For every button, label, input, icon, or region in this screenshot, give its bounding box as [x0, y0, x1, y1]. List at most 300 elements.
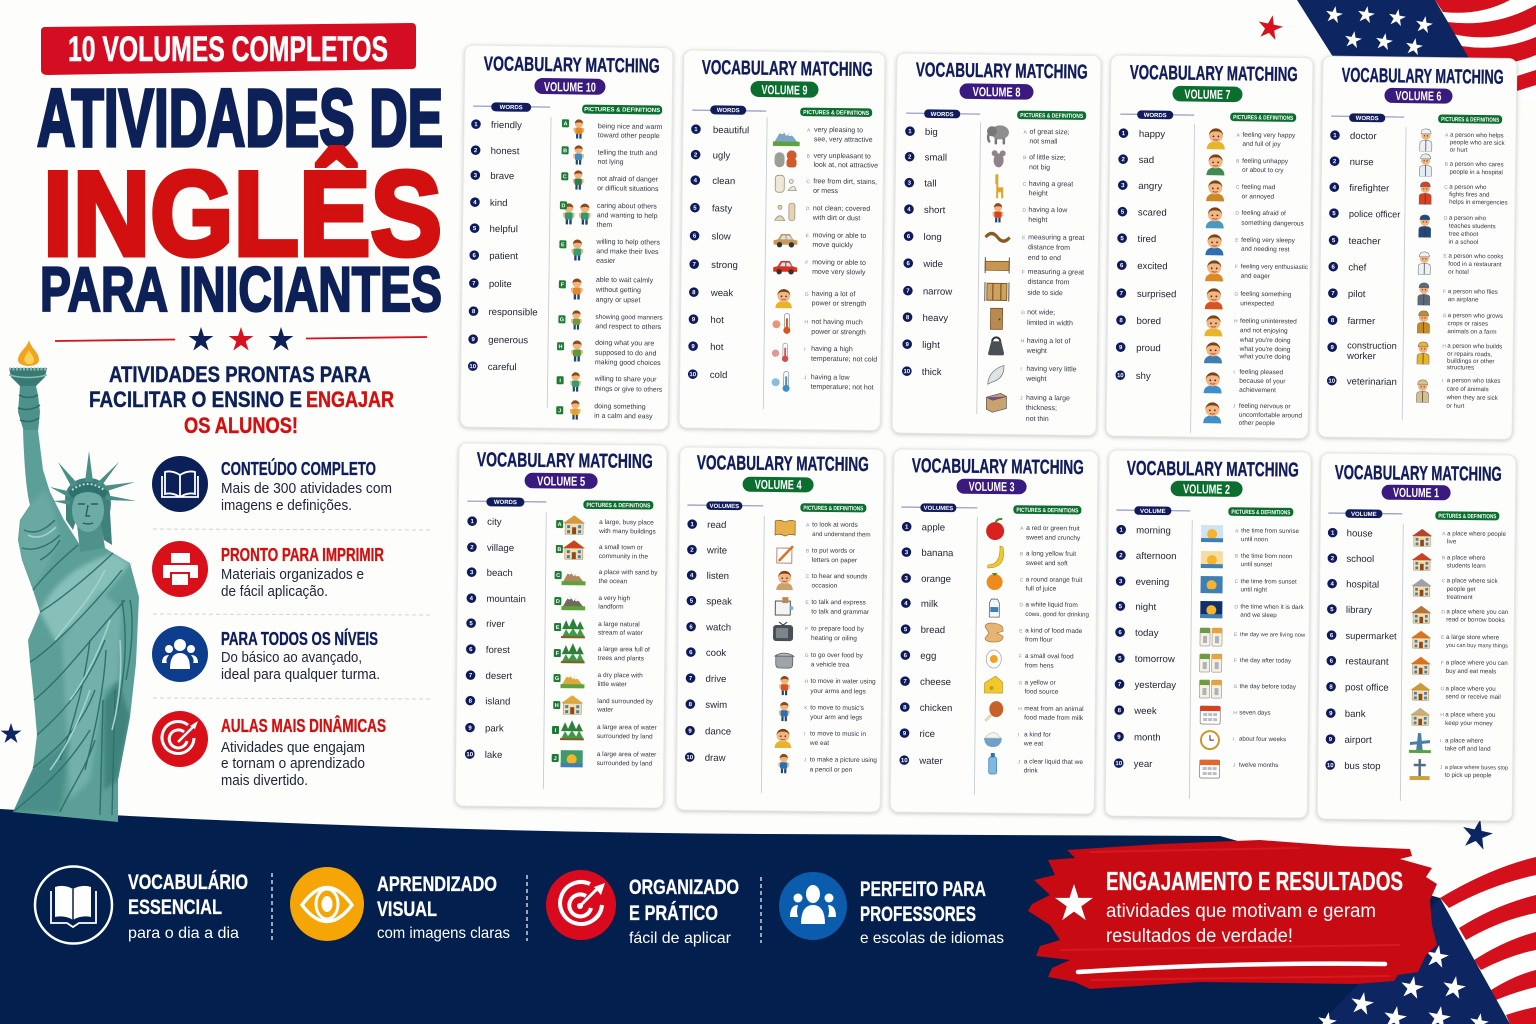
feature: aulas mais dinamicas: e tornam o aprendizado	[221, 756, 365, 772]
definitions column: a vehicle trea	[811, 661, 850, 669]
words column: 5	[1121, 210, 1125, 216]
definitions column: C	[806, 179, 810, 185]
definitions column: being nice and warm	[598, 123, 663, 131]
definitions column: not big	[1029, 164, 1050, 172]
definitions column: height	[1028, 217, 1047, 224]
words column: 10	[689, 372, 697, 378]
definitions column: with dirt or dust	[812, 215, 860, 222]
words column: rice	[919, 729, 935, 740]
words column: clean	[712, 176, 735, 187]
definitions column: a small oval food	[1025, 653, 1074, 660]
words column: village	[487, 543, 514, 554]
words column: morning	[1136, 525, 1171, 537]
words column: bored	[1136, 316, 1161, 327]
definitions column: feeling pleased	[1239, 369, 1284, 376]
definitions column: B	[1023, 155, 1027, 161]
definitions column: a person who grows	[1448, 312, 1503, 320]
picture icons	[770, 129, 800, 392]
definitions column: supposed to do and	[595, 350, 657, 358]
definitions column: a person who takes	[1447, 377, 1500, 385]
definition letters: J	[558, 408, 561, 414]
definitions column: E	[805, 600, 809, 606]
definitions column: telling the truth and	[598, 150, 657, 157]
definitions column: a place where	[1445, 737, 1484, 745]
feature: aulas mais dinamicas: mais divertido.	[221, 773, 308, 789]
heading: VOCABULARY MATCHING	[702, 57, 873, 81]
words column: 1	[1333, 133, 1337, 139]
definitions column: feeling mad	[1242, 184, 1276, 191]
definitions column: what you're doing	[1239, 337, 1291, 344]
words column: 9	[1329, 737, 1333, 743]
volume pill	[750, 81, 819, 98]
words column: excited	[1137, 261, 1168, 272]
definitions column: helps in emergencies	[1449, 199, 1508, 206]
definitions column: F	[805, 260, 808, 266]
definitions column: a red or green fruit	[1026, 525, 1080, 532]
words column: 5	[1119, 604, 1123, 610]
definitions column: willing to help others	[595, 239, 660, 247]
star: navy right	[1459, 816, 1495, 851]
subtitle: ENGAJAR	[306, 387, 394, 412]
words column: island	[485, 696, 510, 708]
definitions column: food in a restaurant	[1448, 261, 1502, 268]
definitions column: to move to music in	[810, 730, 866, 738]
words column: doctor	[1350, 131, 1377, 142]
definitions column: a place where buses stop	[1445, 765, 1508, 771]
feature: para todos os niveis	[152, 626, 380, 683]
definitions column: J	[1233, 404, 1236, 410]
flag: bottom right corner	[1316, 855, 1536, 1024]
words column: small	[925, 152, 947, 164]
definitions column: people in a hospital	[1449, 169, 1503, 176]
definition letters: G	[555, 676, 559, 682]
definitions column: a large area full of	[598, 646, 650, 654]
words column: forest	[486, 645, 510, 656]
definitions column: showing good manners	[595, 314, 663, 322]
words column: tomorrow	[1135, 654, 1175, 665]
words column: 5	[1332, 238, 1336, 244]
definitions column: a long yellow fruit	[1026, 550, 1076, 558]
definitions column: J	[1018, 759, 1021, 765]
definitions column	[1020, 129, 1086, 423]
definitions column: and we sleep	[1240, 612, 1277, 619]
words column: chef	[1348, 262, 1367, 274]
definitions column: not afraid of danger	[597, 176, 659, 184]
definition letters: E	[556, 625, 560, 631]
words column: 2	[1121, 157, 1125, 163]
words column: post office	[1345, 682, 1389, 694]
words column: river	[486, 619, 506, 630]
title: inglês: INGLÊS	[43, 147, 442, 281]
definition letters: A	[563, 121, 568, 127]
column headers	[1328, 509, 1499, 520]
heading: VOCABULARY MATCHING	[1127, 458, 1299, 481]
definitions column	[1018, 525, 1090, 775]
definitions column: feeling very enthusiastic	[1241, 263, 1308, 271]
definitions column: F	[1441, 660, 1444, 666]
subtitle: FACILITAR O ENSINO E	[89, 387, 302, 412]
words column: draw	[705, 753, 726, 764]
words column: 5	[1332, 211, 1336, 217]
words column: wide	[922, 259, 943, 270]
definition letters: I	[559, 378, 561, 384]
panel: volume 6	[1318, 56, 1517, 440]
bottom item: aprendizado visual: APRENDIZADO	[377, 873, 497, 896]
definitions column: we eat	[809, 740, 829, 747]
definition letters: A	[558, 522, 562, 528]
words column: airport	[1344, 735, 1372, 746]
words column: city	[487, 517, 502, 528]
column headers	[473, 102, 662, 115]
bottom item: organizado e pratico: ORGANIZADO	[629, 876, 739, 899]
definitions column: fights fires and	[1449, 191, 1490, 199]
words column: 10	[686, 755, 694, 761]
column headers: PICTURES & DEFINITIONS	[1020, 113, 1083, 120]
volume pill: VOLUME 2	[1183, 481, 1230, 497]
definitions column: H	[1021, 339, 1025, 345]
words column: 9	[691, 344, 695, 350]
picture icons	[1416, 129, 1432, 402]
panel: volume 1	[1317, 453, 1516, 821]
definitions column: a very high	[598, 595, 631, 602]
definitions column: unexpected	[1240, 300, 1274, 308]
words column: yesterday	[1134, 680, 1176, 691]
words column: 8	[906, 315, 910, 321]
definitions column: B	[1445, 162, 1449, 168]
words column	[465, 516, 527, 761]
statue of liberty	[9, 340, 139, 822]
words column: scared	[1138, 207, 1167, 219]
definitions column: without getting	[595, 287, 641, 294]
definitions column: a large store where	[1446, 634, 1500, 641]
definitions column	[596, 519, 660, 768]
definition letters: D	[556, 599, 560, 605]
definitions column: C	[1235, 579, 1239, 585]
words column: 5	[690, 599, 694, 605]
words column: 5	[1120, 236, 1124, 242]
column headers: VOLUME	[1140, 509, 1166, 515]
definitions column: live	[1447, 538, 1457, 545]
words column: 3	[1121, 183, 1125, 189]
definitions column: students learn	[1447, 562, 1486, 570]
definitions column: F	[1235, 264, 1238, 270]
definitions column: not wide;	[1027, 309, 1055, 317]
definitions column: not lying	[597, 159, 624, 166]
words column: listen	[707, 571, 729, 582]
definition letters	[556, 119, 569, 414]
definition letters: H	[559, 344, 563, 350]
volume pill	[534, 78, 606, 95]
words column: 2	[470, 545, 474, 551]
panel: volume 4	[676, 447, 884, 812]
definitions column: the time from sunset	[1241, 578, 1297, 586]
bottom item: vocabulario essencial: VOCABULÁRIO	[128, 871, 248, 894]
words column: week	[1133, 706, 1157, 717]
definitions column: D	[1019, 602, 1023, 608]
definitions column: F	[1234, 658, 1237, 664]
definitions column: able to wait calmly	[596, 277, 654, 284]
definitions column: until sunset	[1241, 561, 1272, 568]
words column: 7	[469, 673, 473, 679]
flag: top right corner	[1297, 0, 1536, 100]
words column: 10	[466, 752, 474, 758]
definitions column: temperature; not cold	[811, 356, 877, 364]
definitions column: angry or upset	[596, 297, 641, 304]
definitions column: water	[596, 706, 614, 714]
words column: generous	[488, 335, 528, 346]
words column: 1	[1122, 131, 1126, 137]
words column: kind	[490, 198, 508, 209]
words column: worker	[1346, 351, 1377, 362]
definitions column: community in the	[599, 553, 648, 560]
words column: 7	[1118, 682, 1122, 688]
definitions column: I	[1018, 732, 1019, 738]
definitions column: take off and land	[1445, 745, 1491, 753]
definitions column: B	[1020, 551, 1024, 557]
feature: conteudo completo: imagens e definições.	[221, 498, 352, 514]
words column: night	[1135, 602, 1157, 613]
words column: park	[485, 723, 504, 734]
words column: sad	[1139, 155, 1154, 166]
words column	[1327, 130, 1401, 388]
definitions column: side to side	[1027, 290, 1063, 297]
definitions column: them	[597, 222, 612, 229]
words column: construction	[1347, 340, 1397, 351]
words column: 1	[690, 522, 695, 528]
definitions column: E	[1235, 238, 1239, 244]
definitions column: a person who	[1449, 184, 1487, 191]
column headers: PICTURES & DEFINITIONS	[1016, 508, 1078, 514]
definition letters: D	[561, 203, 565, 209]
definitions column: B	[1235, 554, 1239, 560]
definitions column: you can buy many things	[1446, 643, 1508, 649]
words column: month	[1134, 732, 1161, 744]
definitions column: people get	[1447, 586, 1476, 593]
definitions column: see, very attractive	[814, 136, 873, 144]
words column: 6	[1118, 630, 1122, 636]
definitions column: structures	[1447, 364, 1474, 372]
heading: VOCABULARY MATCHING	[697, 452, 869, 476]
words column: 5	[1118, 656, 1122, 662]
definitions column: food made from milk	[1024, 714, 1084, 722]
definitions column: things or give to others	[594, 386, 663, 394]
bottom item: aprendizado visual: VISUAL	[377, 898, 437, 921]
definitions column: I	[1440, 738, 1441, 744]
panel: volume 2	[1105, 450, 1311, 818]
definitions column	[593, 123, 666, 421]
definitions column: to go over food by	[811, 652, 864, 659]
definitions column: C	[806, 574, 810, 580]
picture icons	[560, 119, 592, 420]
words column: chicken	[920, 703, 952, 714]
definitions column: land surrounded by	[597, 698, 654, 706]
definitions column: the time from noon	[1241, 553, 1293, 560]
definitions column: or difficult situations	[597, 185, 659, 193]
words column: 6	[907, 261, 911, 267]
words column: teacher	[1349, 236, 1381, 247]
words column: tall	[924, 178, 937, 190]
definitions column: a person who flies	[1448, 288, 1498, 296]
words column: 6	[689, 650, 693, 656]
words column: 4	[1330, 582, 1334, 588]
volume pill: VOLUME 6	[1395, 88, 1442, 104]
definitions column: doing something	[594, 403, 646, 411]
definitions column: feeling very happy	[1242, 132, 1296, 139]
words column: 7	[1331, 291, 1335, 297]
definitions column: and full of joy	[1242, 141, 1281, 148]
definitions column: when they are sick	[1445, 394, 1499, 402]
definitions column: feeling uninterested	[1240, 318, 1297, 325]
words column: farmer	[1347, 316, 1376, 327]
definitions column: and respect to others	[595, 323, 662, 331]
words column: 5	[693, 206, 697, 212]
picture icons	[560, 515, 586, 767]
definitions column: of little size;	[1029, 154, 1066, 162]
definitions column: buy and eat meals	[1446, 668, 1496, 675]
bottom item: aprendizado visual	[290, 867, 510, 942]
definitions column: to move in water using	[811, 678, 876, 686]
words column: 6	[1332, 265, 1336, 271]
words column: 4	[470, 596, 474, 602]
definitions column: move quickly	[812, 242, 853, 249]
definitions column: D	[1234, 604, 1238, 610]
definitions column: landform	[598, 603, 624, 611]
definitions column: A	[807, 128, 811, 134]
callout: engajamento e resultados: atividades que motivam e geram	[1106, 901, 1376, 922]
definitions column: B	[807, 154, 811, 160]
definitions column: making good choices	[595, 359, 661, 367]
words column: 1	[694, 127, 698, 133]
words column: 5	[904, 627, 908, 633]
definitions column: D	[1444, 216, 1448, 222]
definitions column: D	[1235, 211, 1239, 217]
volume pill: VOLUME 8	[972, 84, 1021, 100]
definitions column: G	[1234, 292, 1238, 298]
definitions column: achievement	[1239, 387, 1276, 394]
words column: angry	[1138, 181, 1163, 192]
definitions column: caring about others	[597, 203, 657, 211]
definitions column: having a great	[1029, 181, 1073, 188]
words column: proud	[1136, 343, 1161, 354]
words column: 8	[1331, 318, 1335, 324]
definitions column: B	[1442, 555, 1446, 561]
picture icons	[772, 520, 795, 773]
definitions column: or hurt	[1446, 403, 1465, 410]
words column: bus stop	[1344, 761, 1381, 772]
words column: cheese	[920, 677, 951, 688]
definitions column: a place where you can	[1446, 659, 1508, 667]
words column: 2	[690, 548, 694, 554]
definitions column: send or receive mail	[1445, 693, 1501, 701]
definitions column: power or strength	[811, 329, 866, 336]
definitions column: F	[1443, 289, 1446, 295]
star: red top	[1256, 13, 1285, 41]
definitions column: little water	[597, 681, 628, 688]
definitions column: sweet and soft	[1026, 560, 1068, 567]
definitions column: what you're doing	[1239, 353, 1291, 361]
words column: 9	[471, 337, 476, 343]
definitions column: feeling afraid of	[1241, 210, 1286, 217]
column headers	[901, 503, 1081, 514]
definitions column: easier	[596, 258, 616, 265]
words column: 1	[474, 122, 478, 128]
volume pill: VOLUME 4	[755, 477, 802, 492]
words column: 6	[1330, 633, 1334, 639]
definitions column: crops or raises	[1447, 320, 1488, 328]
badge: 10 volumes completos: 10 VOLUMES COMPLETOS	[68, 30, 388, 69]
words column: 4	[694, 178, 698, 184]
words column: 9	[1119, 345, 1123, 351]
definitions column: a clear liquid that we	[1024, 758, 1083, 766]
definitions column: treatment	[1446, 594, 1473, 601]
definitions column: in a school	[1449, 239, 1478, 246]
definitions column: a kind of food made	[1025, 627, 1083, 635]
bottom item: vocabulario essencial: ESSENCIAL	[128, 896, 222, 919]
words column: 2	[1119, 553, 1123, 559]
words column: 3	[474, 173, 478, 179]
words column: restaurant	[1345, 656, 1389, 668]
volume pill: VOLUME 3	[969, 479, 1015, 494]
definitions column: E	[806, 233, 810, 239]
words column: 3	[470, 570, 474, 576]
definitions column: to move to music's	[810, 704, 865, 712]
definitions column: A	[1236, 133, 1240, 139]
column headers: PICTURES & DEFINITIONS	[1231, 510, 1290, 516]
callout: engajamento e resultados: resultados de verdade!	[1106, 926, 1293, 947]
definitions column: to talk and express	[811, 599, 867, 606]
words column: 4	[690, 573, 694, 579]
column headers: PICTURES & DEFINITIONS	[1233, 115, 1293, 122]
words column: 3	[908, 181, 912, 187]
definitions column: feeling unhappy	[1242, 158, 1289, 165]
definitions column: free from dirt, stains,	[813, 178, 877, 186]
words column: 4	[1333, 185, 1337, 191]
words column: mountain	[486, 594, 526, 605]
words column: 2	[1333, 159, 1337, 165]
words column: long	[924, 232, 942, 243]
definitions column: A	[1023, 130, 1028, 136]
column headers: VOLUME	[1351, 512, 1377, 518]
words column: read	[707, 520, 726, 531]
words column	[1325, 528, 1398, 772]
words column: narrow	[923, 286, 952, 298]
definition letters: H	[555, 703, 559, 709]
definitions column: weight	[1026, 348, 1047, 355]
definitions column: a place where sick	[1447, 577, 1499, 585]
definitions column: E	[1022, 235, 1026, 241]
definitions column: the time from sunrise	[1241, 527, 1300, 535]
words column	[902, 126, 954, 378]
definitions column: what you're doing	[1239, 346, 1291, 353]
star: navy left	[1, 723, 21, 743]
words column: nurse	[1350, 157, 1374, 168]
definitions column: full of juice	[1026, 585, 1057, 593]
definitions column: food source	[1024, 688, 1059, 696]
panel: volume 8	[892, 53, 1101, 436]
definitions column: end to end	[1028, 255, 1061, 262]
feature: aulas mais dinamicas: Atividades que engajam	[221, 740, 365, 756]
feature: aulas mais dinamicas	[152, 711, 386, 789]
definitions column: a place where	[1447, 554, 1486, 562]
picture icons	[984, 519, 1005, 774]
words column: evening	[1136, 577, 1169, 588]
words column: fasty	[712, 203, 732, 215]
definitions column: a large natural	[598, 621, 640, 628]
navy bottom band	[0, 809, 1510, 1024]
definitions column: letters on paper	[812, 557, 858, 564]
definitions column: J	[804, 757, 807, 763]
definitions column: having a large	[1026, 395, 1070, 402]
